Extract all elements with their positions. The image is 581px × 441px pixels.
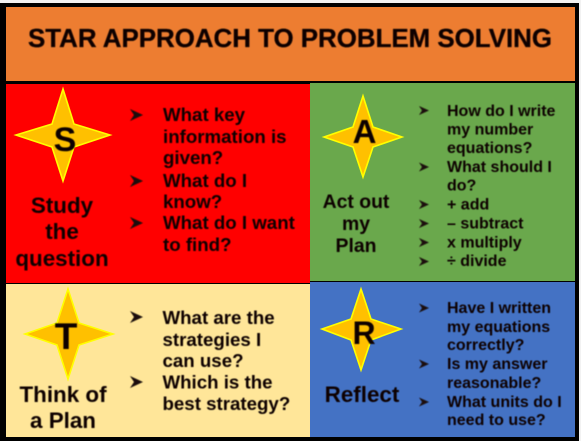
label: study the question xyxy=(15,193,109,271)
panel: S study the question xyxy=(6,84,310,283)
bullets: S questions: What do I xyxy=(163,170,247,191)
bullets: A questions: + add xyxy=(447,196,489,214)
bullets: T questions: Which is the xyxy=(162,372,273,392)
icon: star R xyxy=(322,289,401,370)
bullets: A questions: equations? xyxy=(447,140,532,157)
bullets: A questions: my number xyxy=(447,122,533,138)
label: study the question: question xyxy=(15,246,109,271)
bullets: A questions: ÷ divide xyxy=(447,253,507,270)
bullets: R questions: need to use? xyxy=(447,412,546,429)
icon: star T: T xyxy=(55,316,78,357)
bullets: R questions xyxy=(419,300,562,429)
panel: R reflect xyxy=(310,282,575,437)
bullets: R questions: Is my answer xyxy=(447,356,548,373)
bullets: T questions: can use? xyxy=(162,350,244,371)
bullets: A questions: How do I write xyxy=(447,103,556,120)
bullets: A questions: do? xyxy=(447,178,476,194)
bullets: S questions: What do I want xyxy=(163,212,295,233)
bullets: R questions: my equations xyxy=(447,319,550,336)
bullets: T questions xyxy=(130,307,290,414)
bullets: A questions: – subtract xyxy=(447,216,524,232)
label: study the question: Study xyxy=(31,193,94,218)
bullets: T questions: strategies I xyxy=(162,329,261,350)
label: study the question: the xyxy=(45,219,79,244)
icon: star R: R xyxy=(352,315,376,351)
bullets: A questions: x multiply xyxy=(447,234,522,252)
label: act out my plan: my xyxy=(342,213,370,235)
bullets: T questions: best strategy? xyxy=(162,393,290,414)
label: think of a plan xyxy=(19,382,107,433)
bullets: T questions: What are the xyxy=(162,307,275,328)
icon: star A xyxy=(324,96,402,177)
bullets: S questions: given? xyxy=(163,147,223,168)
label: act out my plan: Act out xyxy=(323,191,390,213)
label: think of a plan: a Plan xyxy=(30,408,96,433)
label: reflect: Reflect xyxy=(325,382,400,407)
label: think of a plan: Think of xyxy=(19,382,107,407)
bullets: A questions xyxy=(419,103,556,270)
icon: star S: S xyxy=(54,121,76,159)
label: act out my plan xyxy=(323,191,390,257)
icon: star T xyxy=(25,289,113,379)
panel: T think of a plan xyxy=(6,284,310,437)
bullets: R questions: What units do I xyxy=(447,394,562,411)
bullets: A questions: What should I xyxy=(447,159,552,176)
bullets: R questions: reasonable? xyxy=(447,375,541,392)
bullets: R questions: Have I written xyxy=(447,300,551,317)
icon: star S xyxy=(16,89,110,181)
label: act out my plan: Plan xyxy=(336,235,376,257)
icon: star A: A xyxy=(353,113,376,150)
bullets: S questions: information is xyxy=(163,126,287,147)
title: STAR APPROACH TO PROBLEM SOLVING xyxy=(28,25,552,53)
bullets: R questions: correctly? xyxy=(447,337,524,354)
bullets: S questions: to find? xyxy=(163,234,232,255)
panel: header xyxy=(6,7,575,81)
bullets: S questions: What key xyxy=(163,104,246,125)
panel: A act out my plan xyxy=(310,83,575,281)
bullets: S questions xyxy=(130,104,295,255)
bullets: S questions: know? xyxy=(163,191,222,212)
